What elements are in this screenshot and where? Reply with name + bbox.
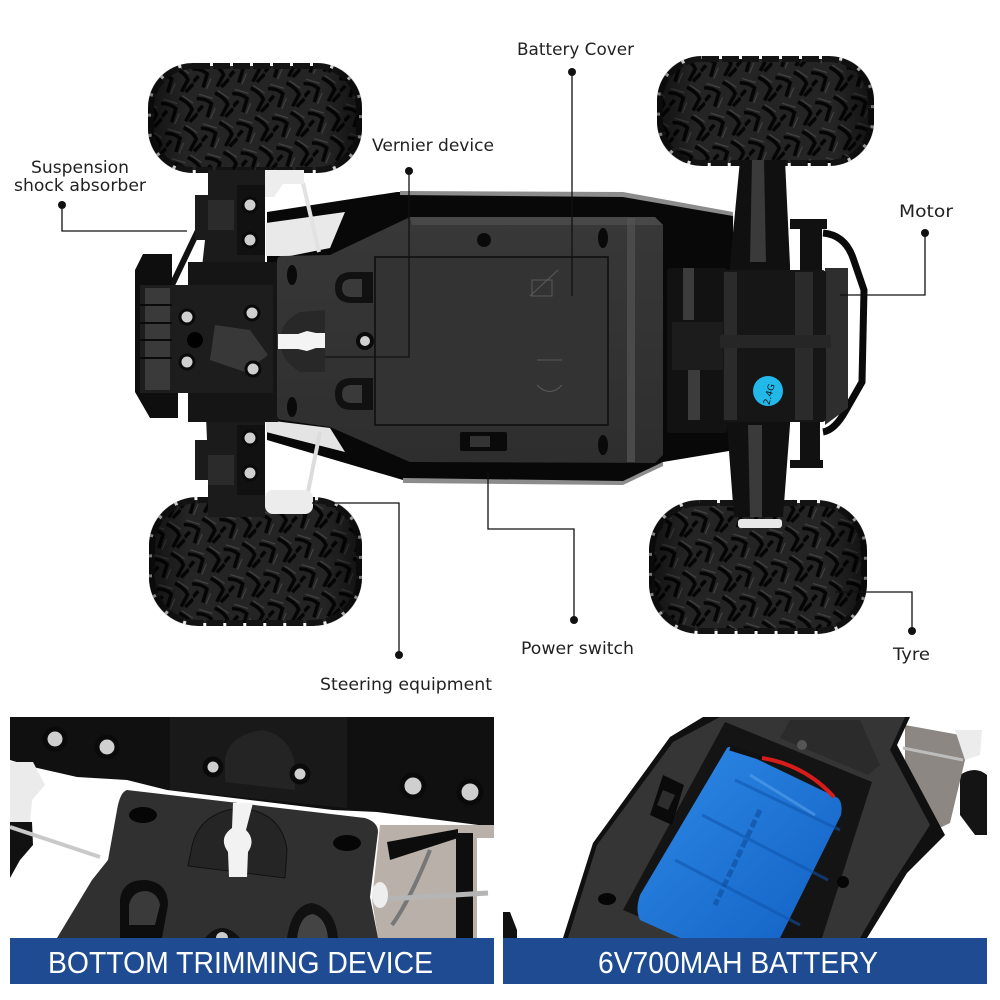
trimming knob (278, 331, 325, 351)
steering rod lower (307, 432, 320, 497)
body glass gap upper (266, 212, 345, 256)
label: suspension shock absorber: Suspension (31, 158, 129, 178)
rc car underside (135, 56, 874, 634)
rear glass area (372, 825, 494, 938)
centre block (170, 717, 347, 808)
pins (790, 219, 827, 468)
body highlights (400, 191, 733, 485)
banner: battery: 6V700MAH BATTERY (598, 945, 878, 980)
screws: front end (180, 198, 260, 480)
knob (224, 803, 253, 877)
rod (903, 748, 963, 760)
centre link (188, 262, 278, 422)
label: battery cover (517, 40, 634, 296)
banner: bottom trimming device: BOTTOM TRIMMING DEVICE (48, 945, 433, 980)
blue 24G sticker (753, 376, 783, 406)
label: vernier device (325, 136, 494, 357)
suspension upper (195, 170, 265, 285)
label: tyre: Tyre (892, 645, 930, 665)
keyholes (129, 807, 361, 851)
photo: bottom trimming device (10, 717, 494, 944)
rear rod (387, 893, 488, 899)
white steering joint lower (265, 490, 313, 514)
battery cover (375, 257, 608, 425)
white steering joint upper (265, 170, 304, 197)
photo: battery (503, 717, 987, 938)
label: motor: Motor (899, 202, 953, 222)
power switch (460, 432, 507, 451)
label: power switch (488, 472, 634, 659)
front strut (172, 220, 203, 285)
label: steering equipment: Steering equipment (320, 675, 492, 695)
well (623, 722, 872, 938)
keyholes and dots (287, 228, 608, 455)
screws (45, 729, 481, 803)
trimming dial (280, 310, 325, 372)
label: vernier device: Vernier device (372, 136, 494, 156)
banner: bottom trimming device (10, 938, 494, 984)
label: suspension shock absorber (14, 158, 187, 231)
chassis body (267, 192, 735, 483)
suspension lower (195, 393, 265, 517)
upper black chassis (10, 717, 494, 827)
label: power switch: Power switch (521, 639, 634, 659)
plate D clips (335, 272, 373, 410)
outer body (563, 717, 945, 938)
label: suspension shock absorber: shock absorber (14, 176, 146, 196)
top detail (780, 720, 880, 775)
label: battery cover: Battery Cover (517, 40, 634, 60)
wire (730, 748, 762, 758)
label: tyre (835, 592, 930, 665)
plate screw (358, 334, 372, 348)
plate highlights (627, 218, 635, 462)
wheel hub ring (738, 519, 782, 528)
far wheel right (960, 770, 987, 835)
front bumper block (135, 254, 273, 418)
battery pack (638, 747, 842, 938)
plate (57, 790, 378, 938)
gearbox main (723, 270, 826, 422)
tyre: front left (148, 63, 362, 173)
bottom plate (277, 217, 663, 463)
lower clips (120, 880, 338, 944)
plate holes (598, 876, 849, 905)
rear glass (905, 725, 965, 835)
label: motor (840, 202, 953, 295)
body glass gap lower (266, 420, 345, 452)
blue 24G sticker: 2.4G (762, 383, 778, 406)
rear bumper loop (823, 233, 864, 432)
battery print (715, 810, 760, 905)
far wheel left (503, 912, 517, 938)
left wheel parts (10, 762, 45, 825)
tyre: rear right (649, 500, 867, 634)
tyre: front right (657, 56, 874, 166)
dial (188, 808, 287, 878)
plate (568, 717, 930, 938)
left rod (10, 827, 100, 857)
switch (650, 775, 684, 825)
right axle (727, 160, 790, 517)
banner: battery (503, 938, 987, 984)
steering rod upper (303, 183, 319, 252)
gearbox left (667, 268, 727, 433)
tyre: rear left (149, 497, 362, 626)
label: steering equipment (312, 503, 492, 695)
